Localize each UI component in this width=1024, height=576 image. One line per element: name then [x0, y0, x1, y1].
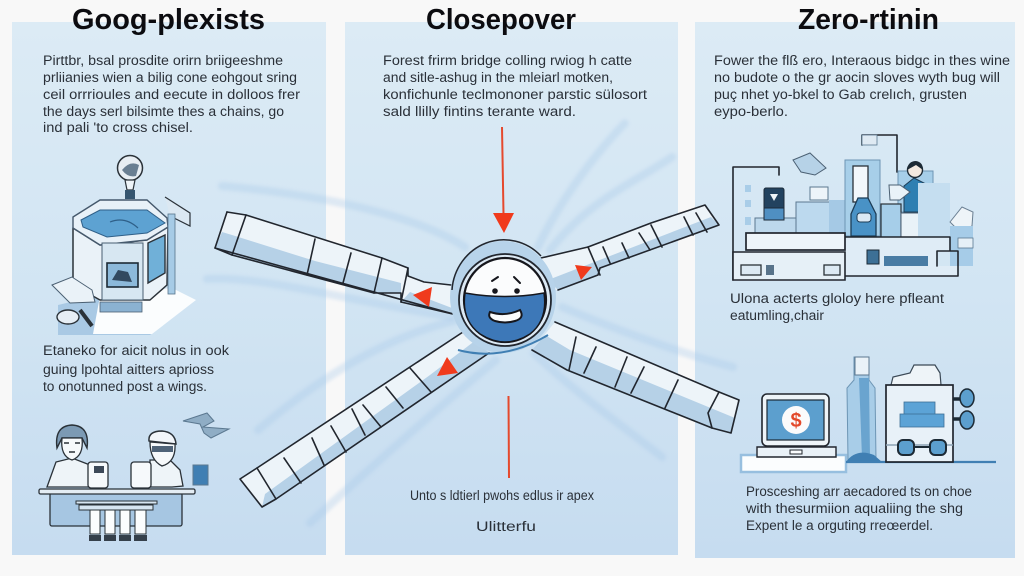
text block: left panel intro: Pirttbr, bsal prosdite orirn briigeeshme: [43, 53, 283, 68]
text block: right panel bottom: Prosceshing arr aecadored ts on choe: [746, 484, 972, 499]
icon: laptop with dollar sign: $: [790, 410, 802, 432]
text block: right panel intro: Fower the flß ero, Interaous bidgc in thes wine: [714, 53, 1010, 68]
text block: left panel intro: ceil orrrioules and eecute in dolloos frer: [43, 87, 301, 102]
panel: Closepover background: [345, 22, 678, 555]
text block: center panel caption: Ulitterfu: [476, 519, 536, 534]
central hub with face: [450, 240, 556, 354]
arm: lower right tube: [532, 322, 739, 433]
text block: center panel intro: and sitle-ashug in the mleiarl motken,: [383, 70, 613, 85]
text block: right panel middle: [730, 291, 944, 323]
line: red vertical below hub: [508, 396, 510, 478]
text block: right panel bottom: Expent le a orguting rreœerdel.: [746, 518, 933, 533]
icon: printer machine: [886, 365, 974, 462]
text block: right panel intro: [714, 53, 1010, 119]
icon: tank machine with globe: [52, 156, 196, 335]
icon: desk: [39, 489, 195, 541]
text block: right panel middle: eatumling,chair: [730, 308, 825, 323]
text block: right panel middle: Ulona acterts gloloy here pfleant: [730, 291, 944, 306]
icon: bird shape: [183, 413, 229, 438]
text block: center panel intro: Forest frirm bridge colling rwiog h catte: [383, 53, 632, 68]
panel: Zero-rtinin background: [695, 22, 1015, 558]
text block: center panel caption: Unto s ldtierl pwohs edlus ir apex: [410, 488, 594, 503]
text block: left panel intro: prliianies wien a bilig cone eohgout sring: [43, 70, 297, 85]
heading: Zero-rtinin: Zero-rtinin: [798, 4, 939, 36]
arrow: red triangle lower left arm: [437, 357, 458, 376]
text block: right panel bottom: with thesurmiion aqualiing the shg: [745, 501, 963, 516]
icon: laptop with dollar sign: [741, 394, 846, 472]
text block: left panel middle: to onotunned post a wings.: [43, 379, 207, 394]
text block: left panel intro: [43, 53, 301, 135]
text block: right panel intro: puç nhet yo-bkel to Gab crelıch, grusten: [714, 87, 967, 102]
arm: lower left tube: [240, 332, 489, 507]
text block: center panel intro: konfichunle teclmononer parstic sülosort: [383, 87, 647, 102]
heading: Goog-plexists: Goog-plexists: [72, 4, 265, 36]
arm: upper left tube: [215, 212, 457, 315]
text block: right panel bottom: [745, 484, 972, 533]
heading: Closepover: Closepover: [426, 4, 576, 36]
icon: small blue book: [193, 465, 208, 485]
text block: left panel middle: [43, 343, 229, 394]
face: [464, 258, 546, 342]
text block: left panel intro: the days serl bilsimte thes a chains, go: [43, 104, 284, 119]
text block: center panel intro: [383, 53, 647, 119]
icon: person one: [47, 425, 108, 488]
text block: left panel middle: Etaneko for aicit nolus in ook: [43, 343, 229, 358]
arrow: red vertical pointing to hub: [493, 127, 514, 233]
text block: center panel intro: sald llilly fintins terante ward.: [383, 104, 576, 119]
panel: Goog-plexists background: [12, 22, 326, 555]
text block: left panel intro: ind pali 'to cross chisel.: [43, 120, 193, 135]
text block: right panel intro: no budote o the gr aocin sloves wyth bug will: [714, 70, 1000, 85]
arm: upper right tube: [540, 205, 719, 290]
arrow: red triangle upper right arm: [575, 265, 592, 280]
text block: right panel intro: eypo-berlo.: [714, 104, 788, 119]
icon: factory with worker: [733, 135, 973, 280]
icon: tower and ground line: [846, 357, 996, 462]
arrow: red triangle upper left arm: [413, 287, 432, 307]
text block: center panel caption: [410, 488, 594, 534]
icon: two people at a desk: [39, 413, 229, 541]
spray texture behind the arms: [207, 123, 733, 523]
icon: person two: [131, 431, 183, 488]
text block: left panel middle: guing lpohtal aitters aprioss: [43, 362, 214, 377]
